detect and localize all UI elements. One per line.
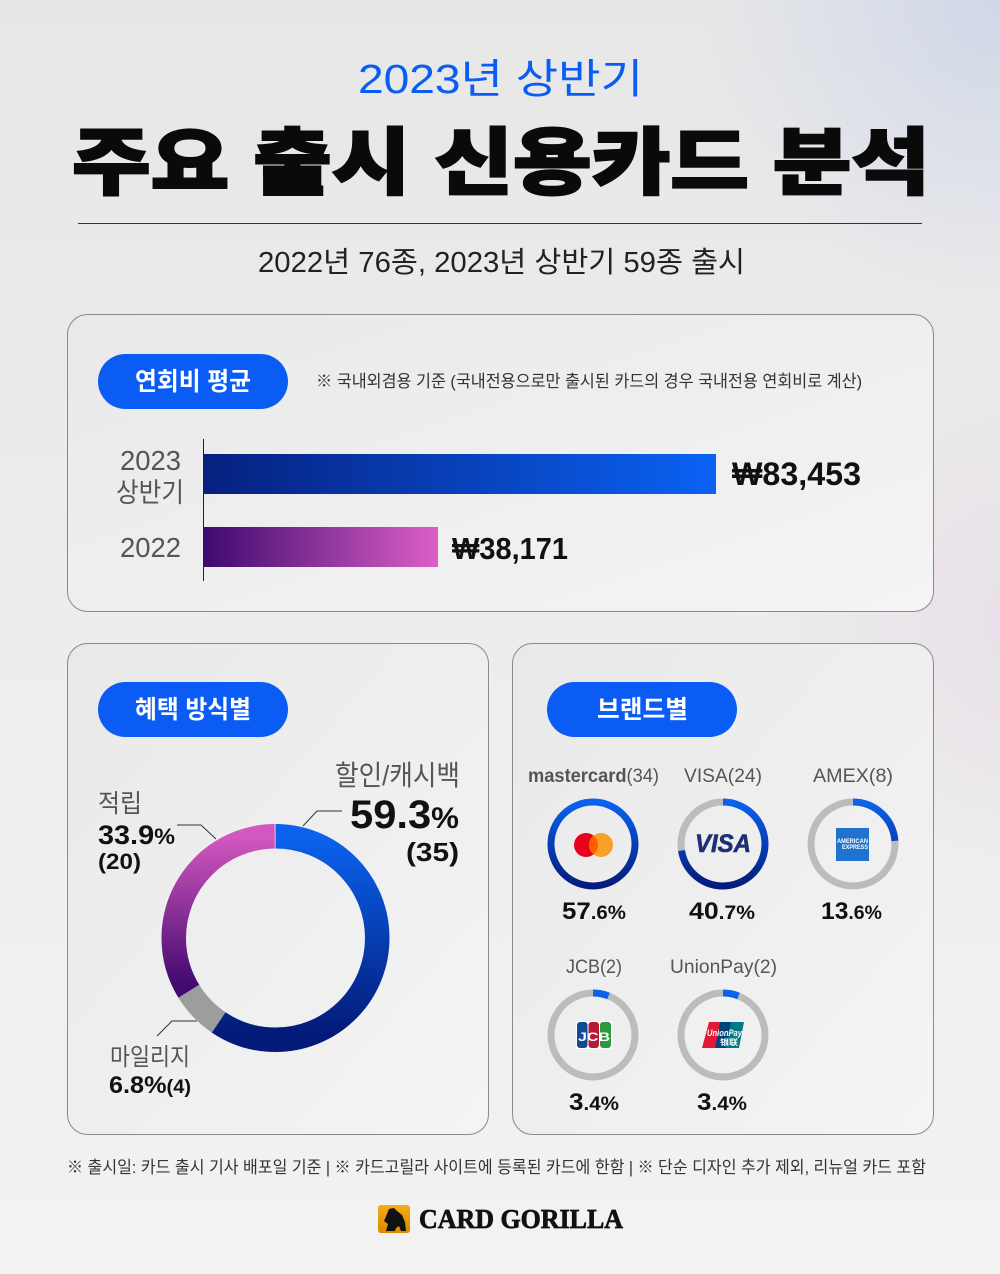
main title: 주요 출시 신용카드 분석 xyxy=(72,104,930,210)
callout: points: 33.9% xyxy=(98,820,175,850)
icon: gorilla badge xyxy=(378,1205,410,1233)
bar row: 2023 first half: 상반기 xyxy=(116,478,184,508)
icon: UnionPay logo: 银联 xyxy=(720,1037,738,1047)
brand: AMEX xyxy=(811,766,895,925)
brand: mastercard: mastercard(34) xyxy=(528,766,659,787)
icon: VISA logo: VISA xyxy=(695,830,751,858)
bar row: 2023 first half: 2023 xyxy=(120,445,181,476)
brand: AMEX: 13.6% xyxy=(821,898,882,925)
callout: mileage xyxy=(109,1021,197,1099)
bar row: 2022: 2022 xyxy=(120,532,181,563)
bar row: 2022: ₩38,171 xyxy=(452,531,568,566)
pill heading: benefit type xyxy=(98,682,288,737)
callout: points: (20) xyxy=(98,849,141,874)
brand: VISA: 40.7% xyxy=(689,898,755,925)
panel: benefit type xyxy=(68,644,488,1134)
icon: AMEX logo xyxy=(836,828,869,861)
icon: JCB logo: JCB xyxy=(578,1030,610,1044)
brand: UnionPay: UnionPay(2) xyxy=(670,957,777,978)
icon: UnionPay logo: UnionPay xyxy=(707,1028,743,1038)
brand: VISA: VISA(24) xyxy=(684,766,762,787)
pill heading: brand: 브랜드별 xyxy=(597,690,688,726)
bar row: 2022 xyxy=(120,527,568,567)
brand: JCB: 3.4% xyxy=(569,1089,619,1116)
callout: points xyxy=(98,790,216,874)
icon: UnionPay logo xyxy=(702,1022,744,1048)
pill heading: annual fee: 연회비 평균 xyxy=(135,362,251,398)
brand: AMEX: AMEX(8) xyxy=(813,766,893,787)
icon: AMEX logo: EXPRESS xyxy=(842,845,868,851)
summary line: 2022년 76종, 2023년 상반기 59종 출시 xyxy=(258,246,745,279)
footnote: ※ 출시일: 카드 출시 기사 배포일 기준 | ※ 카드고릴라 사이트에 등록된 카드에 한함 | ※ 단순 디자인 추가 제외, 리뉴얼 카드 포함 xyxy=(67,1158,926,1177)
logo: Card Gorilla: CARD GORILLA xyxy=(419,1204,623,1234)
icon: AMEX logo: AMERICAN xyxy=(837,839,868,845)
bar row: 2023 first half: ₩83,453 xyxy=(732,456,861,492)
pill heading: benefit type: 혜택 방식별 xyxy=(135,690,251,726)
brand: mastercard: 57.6% xyxy=(562,898,626,925)
subtitle: 2023 first half: 2023년 상반기 xyxy=(358,56,643,102)
brand: UnionPay xyxy=(670,957,777,1116)
icon: mastercard logo xyxy=(574,833,613,857)
panel: card brand xyxy=(512,644,934,1134)
callout: mileage: 마일리지 xyxy=(110,1044,190,1071)
brand: VISA xyxy=(681,766,765,925)
brand: JCB: JCB(2) xyxy=(566,957,622,978)
callout: points: 적립 xyxy=(98,790,142,818)
callout: discount cashback xyxy=(303,760,460,867)
callout: discount cashback: 59.3% xyxy=(350,793,459,837)
donut chart xyxy=(174,836,377,1040)
pill heading: brand xyxy=(547,682,737,737)
panel: annual fee average xyxy=(68,314,934,612)
callout: discount cashback: 할인/캐시백 xyxy=(335,760,460,791)
brand: UnionPay: 3.4% xyxy=(697,1089,747,1116)
callout: discount cashback: (35) xyxy=(406,837,459,867)
icon: JCB logo xyxy=(576,1021,612,1049)
bar row: 2023 first half xyxy=(116,445,861,508)
pill heading: annual fee xyxy=(98,354,288,409)
callout: mileage: 6.8%(4) xyxy=(109,1072,191,1099)
brand: JCB xyxy=(551,957,635,1116)
brand: mastercard xyxy=(528,766,659,925)
annual fee note: ※ 국내외겸용 기준 (국내전용으로만 출시된 카드의 경우 국내전용 연회비로 계산) xyxy=(316,372,862,391)
